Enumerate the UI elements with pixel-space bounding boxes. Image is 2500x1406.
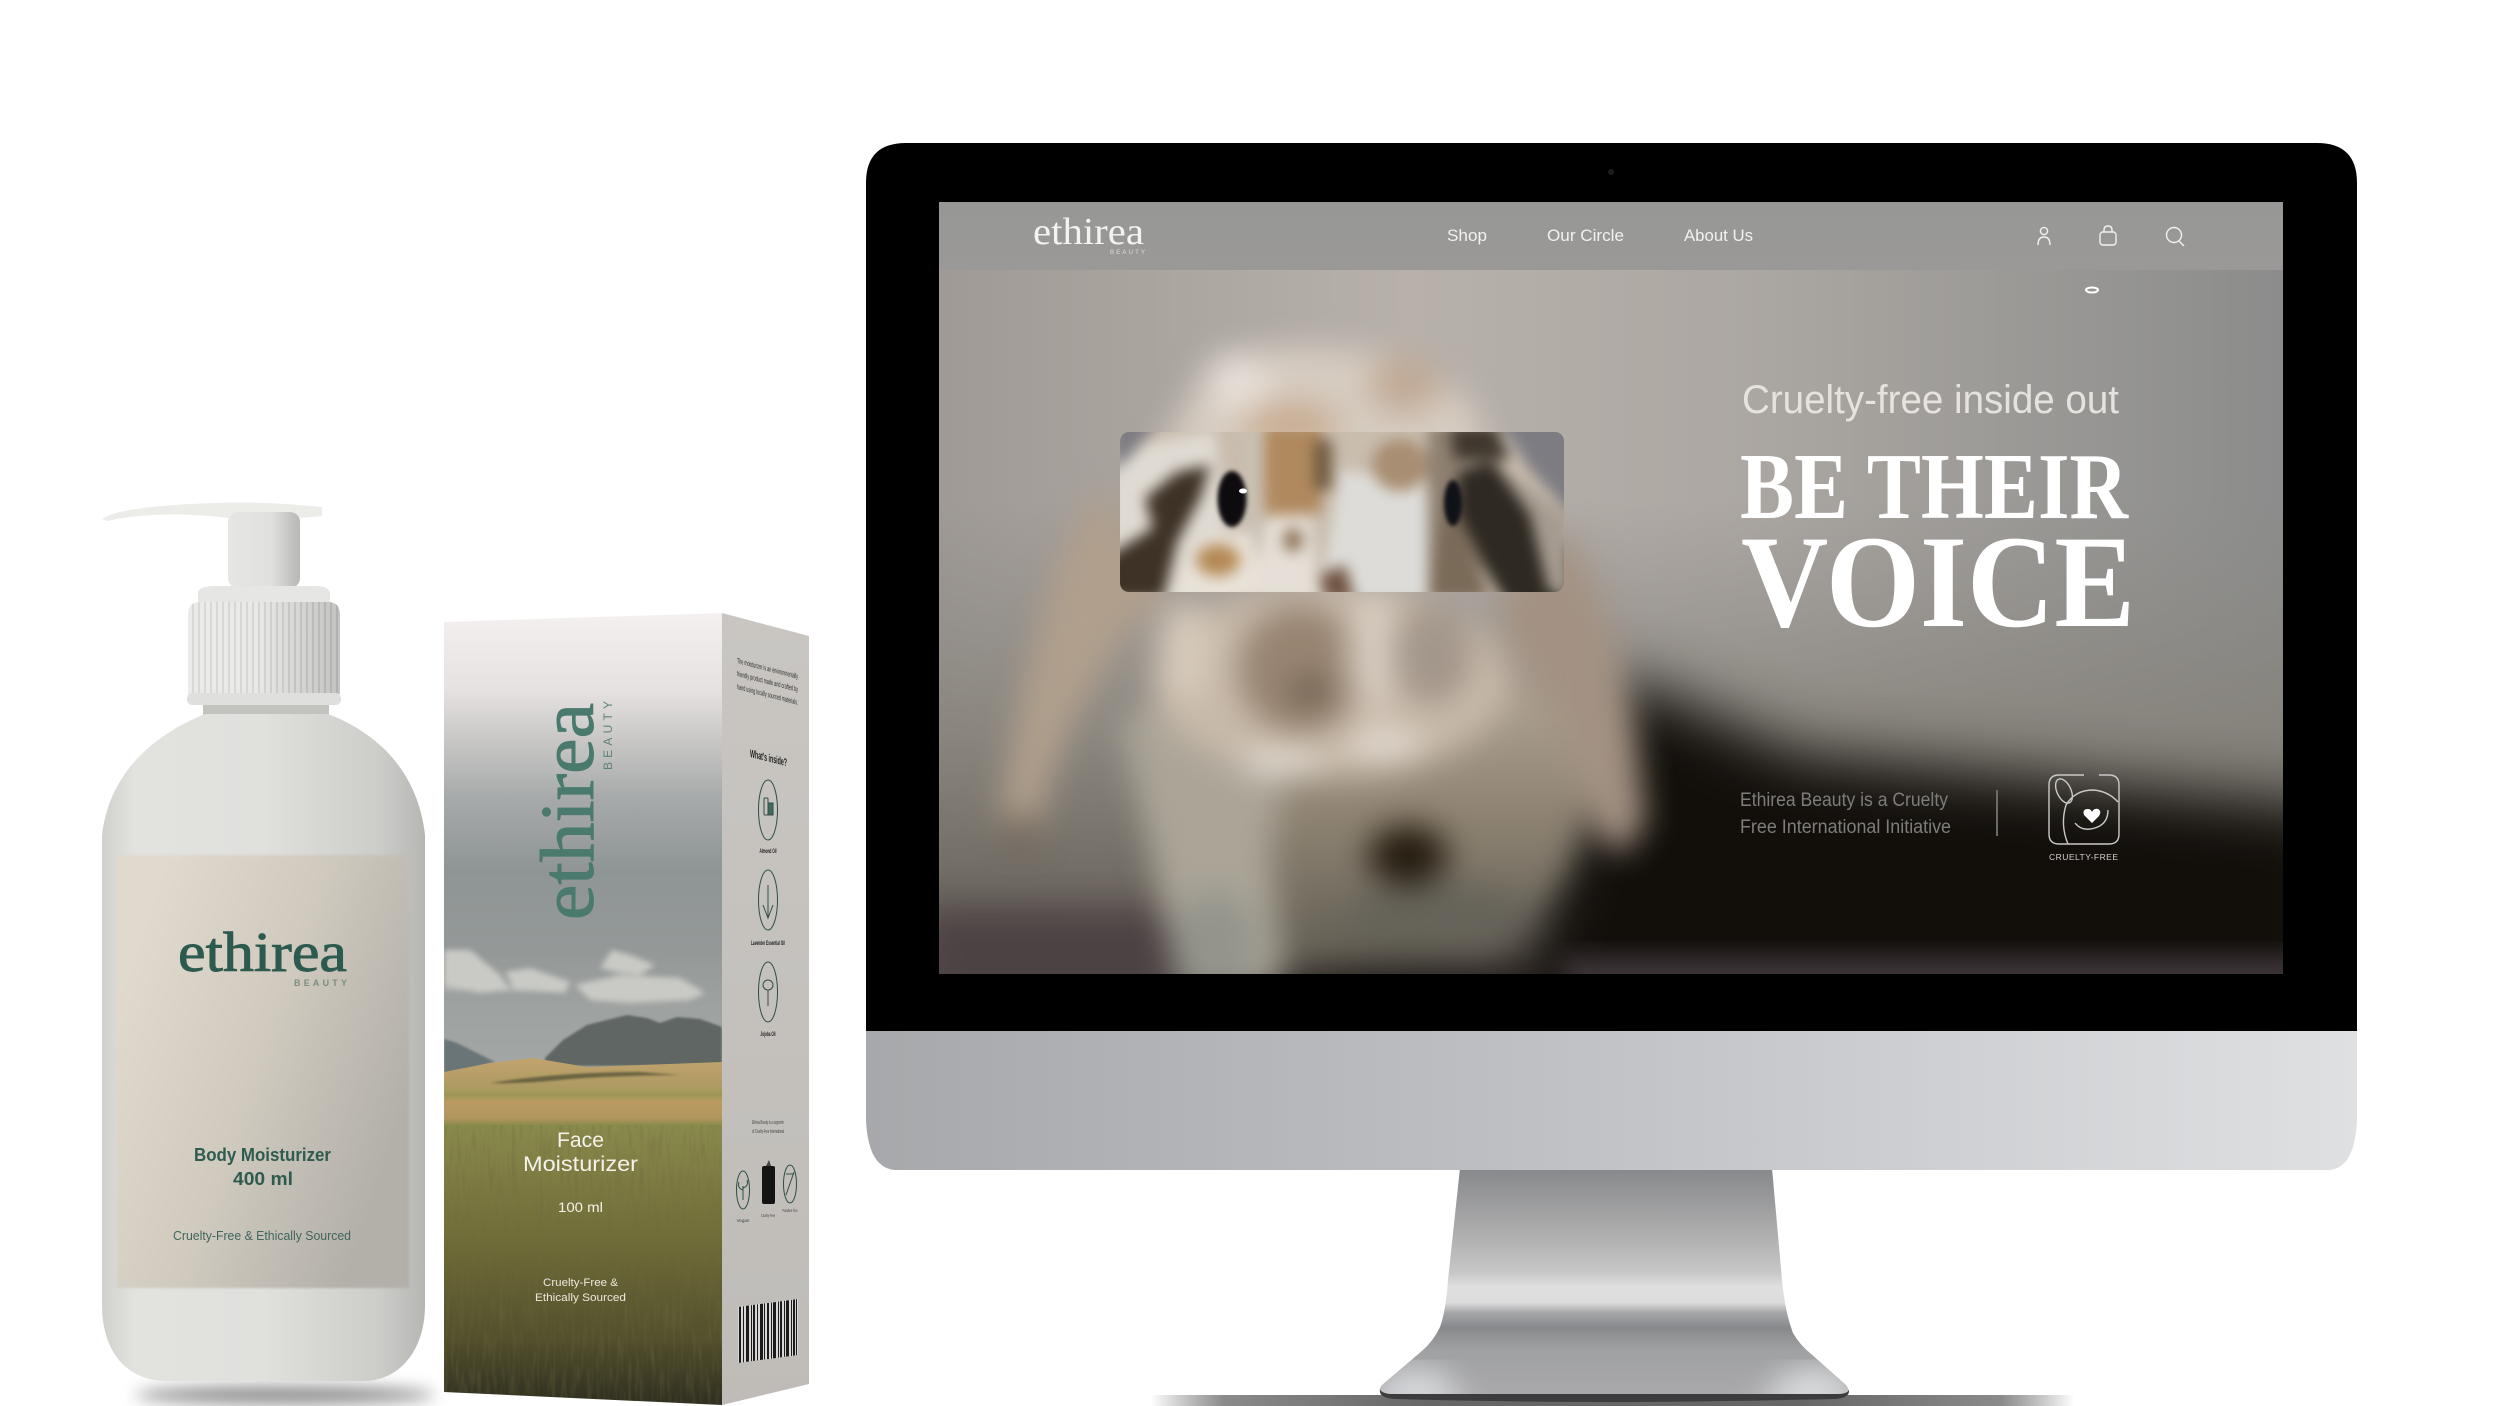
mountains [444, 1015, 722, 1074]
label: vegan: Vegan [737, 1218, 750, 1223]
box front panel [444, 610, 722, 1406]
monitor stand [1380, 1170, 1849, 1402]
eye: left [1218, 471, 1247, 527]
barcode [738, 1299, 798, 1363]
product volume: 400 ml [233, 1169, 293, 1189]
label: paraben free: Paraben-free [782, 1208, 798, 1213]
bottle logo subtitle: BEAUTY [294, 978, 347, 988]
sharp rabbit eyes window [1120, 432, 1564, 592]
hero tagline: Cruelty-free inside out [1742, 378, 2119, 422]
nav logo subtitle: BEAUTY [1110, 250, 1145, 256]
icon: vegan [736, 1171, 750, 1209]
clouds [444, 950, 705, 1003]
blurred rabbit [1000, 345, 1646, 1005]
bottle body [102, 714, 425, 1381]
icon: jojoba [758, 962, 778, 1022]
website screen [939, 202, 2283, 974]
initiative text line 2: Free International Initiative [1740, 817, 1951, 838]
divider [1996, 790, 1998, 836]
box vertical subtitle: BEAUTY [601, 701, 615, 770]
box name line 1: Face [557, 1129, 604, 1152]
side description: friendly product made and crafted by [737, 669, 798, 694]
bottle label [117, 855, 409, 1288]
stand foot [1380, 1389, 1849, 1402]
icon: almond oil [758, 780, 778, 840]
grass field [444, 1058, 722, 1406]
box side panel: hand using locally sourced materials. [737, 682, 798, 707]
nav link: shop: Shop [1447, 226, 1487, 245]
box side panel: Ethirea Beauty is a supporter [752, 1120, 784, 1126]
box claim line 2: Ethically Sourced [535, 1292, 626, 1304]
icon: account [2038, 227, 2050, 245]
monitor chin [866, 1031, 2357, 1170]
product: face moisturizer box [444, 610, 809, 1406]
nav link: about us: About Us [1684, 226, 1753, 245]
side description [737, 656, 798, 707]
icon: cruelty-free bag [762, 1160, 775, 1204]
hero heading line 2: VOICE [1741, 508, 2135, 655]
rabbit head [1150, 345, 1508, 778]
box name line 2: Moisturizer [523, 1153, 638, 1176]
icon: search [2166, 228, 2184, 246]
nav link: our circle: Our Circle [1547, 226, 1624, 245]
box vertical logo: ethirea [526, 703, 610, 920]
badge caption: CRUELTY-FREE [2049, 852, 2118, 862]
neck [203, 705, 329, 719]
box side panel: Jojoba Oil [760, 1031, 776, 1038]
stand base highlights [1380, 1360, 1848, 1395]
initiative text line 1: Ethirea Beauty is a Cruelty [1740, 790, 1948, 811]
product claim: Cruelty-Free & Ethically Sourced [173, 1228, 351, 1243]
hero background [939, 270, 2283, 974]
box side panel: Lavender Essential Oil [751, 940, 785, 947]
rabbit face markings [1159, 355, 1472, 885]
icon: lavender [758, 870, 778, 930]
nav logo: ethirea [1033, 211, 1144, 253]
navigation bar [938, 202, 2283, 270]
box side panel: Almond Oil [760, 848, 777, 855]
eye: right [1444, 480, 1462, 526]
side supporter note [752, 1120, 784, 1135]
ribbed cap [188, 602, 340, 694]
monitor shadow [1151, 1395, 2074, 1406]
pump collar [198, 586, 330, 602]
bottle logo: ethirea [178, 922, 347, 984]
product: body moisturizer bottle [102, 502, 425, 1381]
box side panel [722, 613, 809, 1405]
icon: bag [2100, 226, 2116, 245]
icon: paraben free [784, 1165, 796, 1203]
rabbit ears [1000, 487, 1646, 855]
shadow under bottle [135, 1386, 435, 1404]
pump nozzle [102, 502, 322, 521]
pump stem [228, 512, 300, 588]
label: cruelty-free: Cruelty-Free [761, 1213, 775, 1218]
webcam [1608, 169, 1614, 175]
rabbit body [1114, 679, 1601, 974]
box side panel: of Cruelty-Free International [752, 1129, 784, 1135]
icon: cruelty-free badge [2049, 775, 2119, 844]
monitor bezel [866, 143, 2357, 1031]
product name: Body Moisturizer [194, 1145, 331, 1165]
cursor mark [2086, 288, 2098, 292]
hero heading line 1: BE THEIR [1740, 435, 2129, 539]
cap ring [187, 693, 341, 705]
box claim line 1: Cruelty-Free & [543, 1277, 619, 1289]
box side panel: What's inside? [750, 748, 787, 769]
box side panel: The moisturizer is an environmentally [737, 656, 798, 681]
box volume: 100 ml [558, 1199, 603, 1215]
